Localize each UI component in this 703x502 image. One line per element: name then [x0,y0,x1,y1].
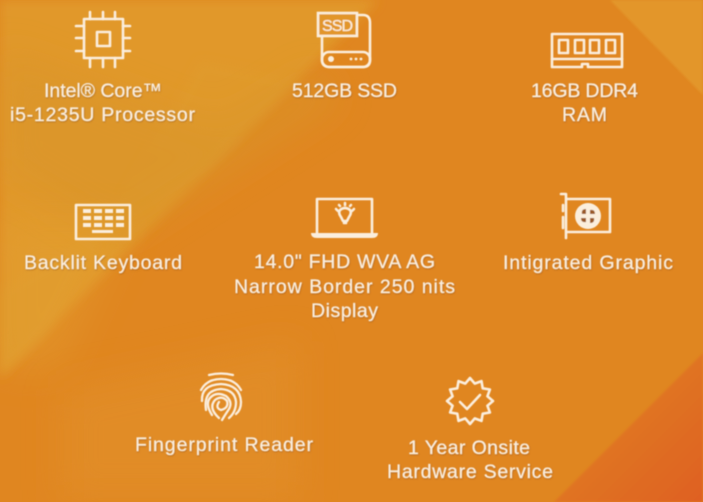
icon: graphics card [561,194,610,238]
label: processor: i5-1235U Processor [10,104,196,126]
label: processor: Intel® Core™ [44,80,162,102]
label: memory: RAM [562,104,607,126]
feature: storage [292,13,397,102]
feature: display [234,199,455,322]
label: keyboard: Backlit Keyboard [24,252,182,274]
label: display: 14.0" FHD WVA AG [254,251,435,273]
icon: keyboard [76,205,130,239]
label: warranty [387,437,553,483]
label: processor [10,80,196,126]
label: display [234,251,455,322]
label: warranty: Hardware Service [387,461,553,483]
feature: warranty [387,378,553,483]
label: display: Display [311,300,378,322]
label: display: Narrow Border 250 nits [234,276,455,298]
icon: chip [76,12,130,67]
label: warranty: 1 Year Onsite [408,437,530,459]
icon: SSD drive: SSD [322,18,353,35]
feature: memory [531,34,638,126]
feature: processor [10,12,196,126]
label: fingerprint: Fingerprint Reader [135,434,314,456]
icon: laptop with bulb [311,199,378,238]
label: storage: 512GB SSD [292,80,397,102]
feature: graphics [503,194,673,274]
feature: fingerprint [135,374,314,456]
feature: keyboard [24,205,182,274]
label: memory [531,80,638,126]
icon: fingerprint [201,374,241,420]
icon: check badge [447,378,493,424]
label: graphics: Intigrated Graphic [503,252,673,274]
label: memory: 16GB DDR4 [531,80,638,102]
icon: RAM module [552,34,622,67]
